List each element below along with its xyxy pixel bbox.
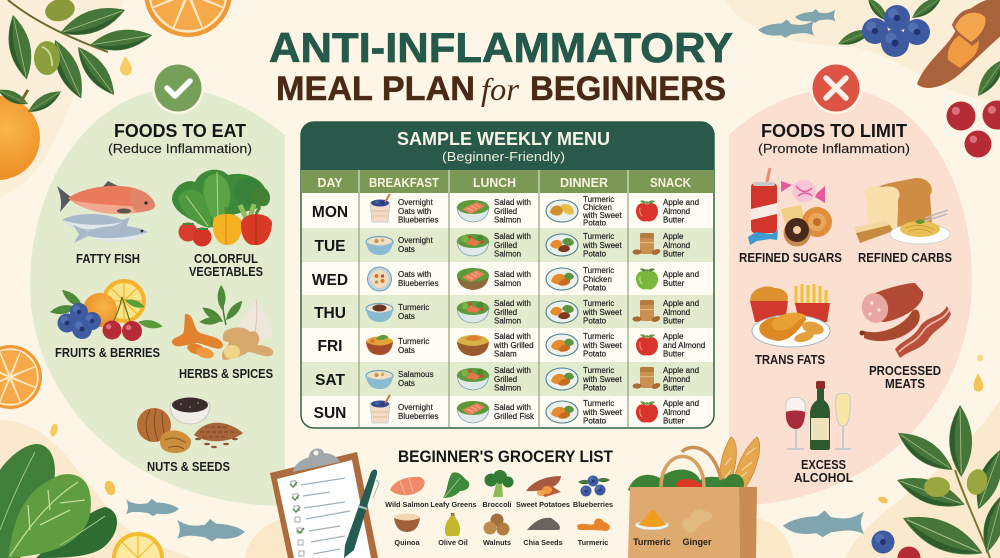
row: Tuesday: Oats [398,245,415,254]
row: Saturday: Salmon [494,384,521,392]
row: Monday: Oats with [398,207,431,216]
grocery: chia seeds [523,518,563,547]
panel: beginner's grocery list [385,447,614,547]
subheading: reduce inflammation: (Reduce Inflammation) [108,141,252,156]
row: Monday: Potato [583,218,607,228]
label: refined carbs: REFINED CARBS [858,251,952,265]
row: Friday: Oats [398,346,415,355]
row: Friday: Butter [663,350,685,358]
row: Wednesday: Potato [583,284,607,292]
row: Sunday: Overnight [398,403,433,412]
grocery: blueberries [573,476,613,509]
row: Sunday: Butter [663,416,685,426]
row: Sunday: Grilled Fisk [494,412,535,421]
row: Thursday: Potato [583,316,607,326]
grocery: leafy greens [430,472,477,509]
icon: clipboard and pen [270,448,379,558]
icon: refined carbs [854,178,950,244]
row: Monday: Almond [663,207,690,216]
row: Saturday [315,366,699,392]
grocery: sweet potatoes: Sweet Potatoes [516,500,570,509]
row: Saturday: Oats [398,379,415,388]
row: Thursday: Salmon [494,316,521,326]
row: Tuesday [314,232,690,258]
title line 2: MEAL PLAN [276,70,475,108]
row: Monday [312,194,699,228]
row: Saturday: Grilled [494,375,517,384]
decoration: bottom-left spinach and citrus [0,345,245,558]
row: Tuesday: Salmon [494,250,521,258]
icon: fatty fish [57,181,155,243]
subheading: promote inflammation: (Promote Inflammation) [758,141,910,156]
grocery: walnuts: Walnuts [483,538,511,547]
row: Friday: Potato [583,350,607,358]
row: Monday: Overnight [398,198,433,207]
icon: grocery bag [628,437,760,558]
label: alcohol: ALCOHOL [794,471,853,485]
title line 2: BEGINNERS [530,70,726,108]
title line 1: ANTI-INFLAMMATORY [269,24,733,71]
grocery: broccoli: Broccoli [482,500,512,509]
row: Thursday: Oats [398,312,415,321]
row: Sunday: Almond [663,408,690,417]
icon: processed meats [859,283,951,358]
panel: foods to eat [30,62,285,506]
row: Monday: Blueberries [398,216,438,224]
row: Monday: Apple and [663,198,699,207]
row: Tuesday: Salad with [494,232,531,241]
row: Thursday [314,299,699,326]
row: Saturday: Turmeric [583,366,614,375]
row: Sunday: SUN [314,405,346,422]
row: Tuesday: TUE [314,238,346,255]
row: Monday: with Sweet [582,211,622,220]
row: Thursday: Salad with [494,299,531,308]
row: Friday [318,332,705,358]
row: Friday: and Almond [663,341,705,350]
row: Sunday [314,395,699,426]
row: Wednesday: Apple and [663,270,699,279]
title [269,24,733,108]
row: Saturday: Salamous [398,370,434,379]
row: Thursday: Turmeric [398,303,429,312]
icon: colorful vegetables [172,170,272,246]
heading: foods to eat: FOODS TO EAT [114,121,246,141]
row: Thursday: Apple and [663,299,699,308]
row: Friday: with Grilled [493,341,534,350]
row: Tuesday: Almond [663,241,690,250]
row: Thursday: with Sweet [582,308,622,317]
grocery: olive oil: Olive Oil [438,538,468,547]
row: Wednesday [312,266,699,292]
icon: check badge [152,62,204,114]
row: Monday: Chicken [583,203,612,212]
table subtitle: (Beginner-Friendly) [442,149,565,164]
row: Monday: MON [312,204,348,221]
grocery: turmeric [577,518,610,547]
row: Wednesday: Butter [663,279,685,288]
column headers: BREAKFAST [369,176,439,190]
label: trans fats: TRANS FATS [755,353,825,367]
grocery: walnuts [483,514,511,547]
grocery: chia seeds: Chia Seeds [523,538,563,547]
row: Tuesday: Turmeric [583,232,614,241]
row: Tuesday: Overnight [398,236,433,245]
row: Friday: with Sweet [582,341,622,350]
row: Tuesday: Butter [663,250,685,258]
row: Tuesday: Grilled [494,241,517,250]
bag item: turmeric: Turmeric [633,537,671,547]
row: Wednesday: Salad with [494,270,531,279]
row: Friday: Salad with [494,332,531,341]
label: excess: EXCESS [801,458,846,472]
heading: foods to limit: FOODS TO LIMIT [761,121,907,141]
title line 2 [276,70,726,108]
column headers: DAY [318,176,343,190]
row: Saturday: Potato [583,384,607,392]
icon: trans fats [750,284,830,347]
row: Saturday: Butter [663,384,685,392]
title line 2: for [481,71,520,107]
row: Saturday: Apple and [663,366,699,375]
row: Monday: Salmon [494,216,521,224]
row: Wednesday: Turmeric [583,266,614,275]
grocery: turmeric: Turmeric [578,538,608,547]
icon: fruits and berries [49,279,164,341]
label: fruits and berries: FRUITS & BERRIES [55,346,160,360]
table header band [301,122,714,170]
grocery: quinoa [394,514,421,547]
grocery: leafy greens: Leafy Greens [430,500,477,509]
column headers: LUNCH [473,176,516,190]
grocery: sweet potatoes [516,476,570,509]
icon: excess alcohol [786,381,851,450]
row: Tuesday: with Sweet [582,241,622,250]
icon: nuts and seeds [137,398,243,453]
grocery: quinoa: Quinoa [394,538,421,547]
grocery: broccoli [482,470,514,509]
row: Friday: Apple [663,332,684,341]
icon: refined sugars [748,168,832,246]
label: colorful: COLORFUL [194,252,258,266]
decoration: top-left olive branch and orange [0,0,232,180]
grocery: wild salmon [385,477,429,509]
icon: herbs and spices [172,285,273,360]
grocery: wild salmon: Wild Salmon [385,500,429,509]
row: Friday: Salam [494,350,517,358]
row: Thursday: Grilled [494,308,517,317]
row: Saturday: with Sweet [582,375,622,384]
panel: foods to limit [729,62,972,506]
row: Saturday: Salad with [494,366,531,375]
row: Wednesday: Oats with [398,270,431,279]
icon: x badge [810,62,862,114]
row: Monday: Salad with [494,198,531,207]
row: Wednesday: Salmon [494,279,521,288]
panel: sample weekly menu table [301,122,714,428]
bag item: ginger: Ginger [682,537,712,547]
row: Sunday: Salad with [494,403,531,412]
decoration: top-right berries and sweet potato [758,0,1000,157]
row: Sunday: Apple and [663,399,699,408]
decoration: bottom-right olive branch and fish [783,354,1000,558]
label: vegetables: VEGETABLES [189,265,263,279]
row: Monday: Grilled [494,207,517,216]
label: processed: PROCESSED [869,364,941,378]
row: Tuesday: Potato [583,250,607,258]
row: Thursday: Turmeric [583,299,614,308]
row: Sunday: Potato [583,416,607,426]
row: Monday: Butter [663,216,685,224]
label: fatty fish: FATTY FISH [76,252,140,266]
row: Sunday: Turmeric [583,399,614,408]
row: Thursday: THU [314,305,346,322]
label: refined sugars: REFINED SUGARS [739,251,842,265]
label: meats: MEATS [885,377,925,391]
row: Thursday: Butter [663,316,685,326]
grocery: olive oil [438,513,468,547]
row: Friday: FRI [318,338,342,355]
label: herbs and spices: HERBS & SPICES [179,367,273,381]
row: Monday: Turmeric [583,195,614,204]
label: nuts and seeds: NUTS & SEEDS [147,460,230,474]
row: Thursday: Almond [663,308,690,317]
grocery: blueberries: Blueberries [573,500,613,509]
row: Saturday: SAT [315,372,345,389]
column headers: SNACK [650,176,691,190]
heading: grocery list: BEGINNER'S GROCERY LIST [398,447,614,466]
row: Friday: Turmeric [398,337,429,346]
table title: SAMPLE WEEKLY MENU [397,129,610,149]
column headers: DINNER [560,176,608,190]
row: Saturday: Almond [663,375,690,384]
row: Tuesday: Apple [663,232,684,241]
row: Sunday: with Sweet [582,408,622,417]
row: Wednesday: Blueberries [398,279,438,288]
row: Sunday: Blueberries [398,412,438,421]
column headers [301,170,714,193]
row: Wednesday: Chicken [583,275,612,284]
row: Wednesday: WED [312,272,348,289]
row: Friday: Turmeric [583,332,614,341]
